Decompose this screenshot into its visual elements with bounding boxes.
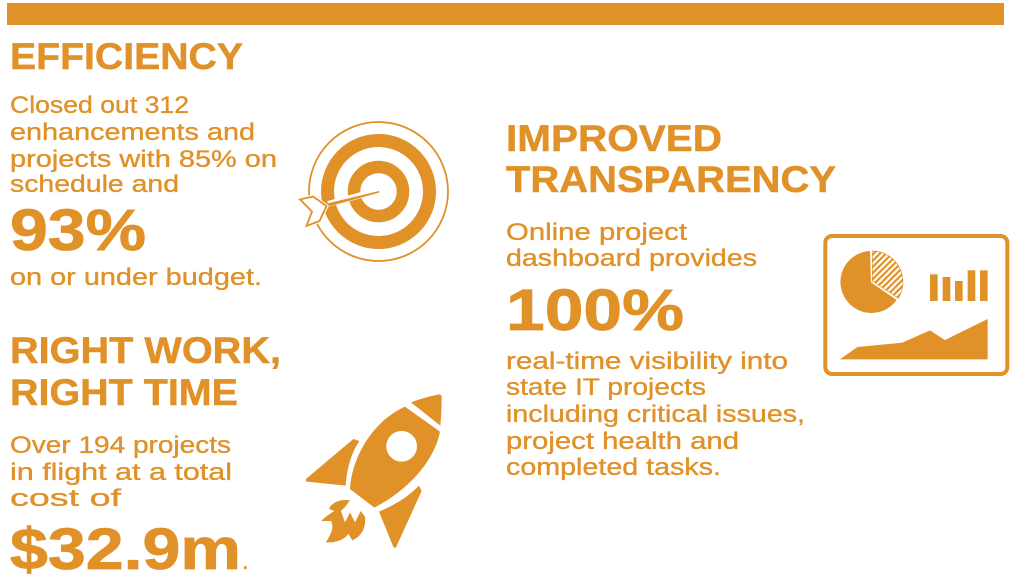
text: online project dashboard — [506, 219, 757, 272]
heading: efficiency: EFFICIENCY — [10, 36, 243, 77]
text: projects in flight: Over 194 projects — [10, 432, 231, 459]
top bar — [7, 3, 1004, 25]
text: real-time visibility: completed tasks. — [506, 454, 721, 481]
text: efficiency description — [10, 92, 277, 198]
text: efficiency description: schedule and — [10, 171, 179, 198]
text: efficiency description: projects with 85% on — [10, 146, 277, 173]
stat: 93%: 93% — [10, 198, 146, 263]
text: online project dashboard: Online project — [506, 219, 687, 246]
text: real-time visibility: including critical issues, — [506, 401, 805, 428]
heading: improved transparency: TRANSPARENCY — [506, 159, 836, 200]
heading: right work, right time: RIGHT WORK, — [10, 330, 281, 371]
text: real-time visibility: state IT projects — [506, 374, 706, 401]
text: real-time visibility: project health and — [506, 428, 739, 455]
text: efficiency description: enhancements and — [10, 119, 255, 146]
panel: improved transparency — [506, 118, 836, 481]
stat: 100%: 100% — [506, 278, 684, 343]
text: on or under budget: on or under budget. — [10, 264, 262, 291]
heading: improved transparency — [506, 118, 836, 200]
text: projects in flight: in flight at a total — [10, 459, 232, 486]
stat: $32.9m: . — [242, 548, 249, 575]
text: real-time visibility: real-time visibility into — [506, 348, 788, 375]
text: online project dashboard: dashboard provides — [506, 245, 757, 272]
panel: right work, right time — [10, 330, 281, 576]
panel: efficiency — [10, 36, 277, 291]
text: real-time visibility — [506, 348, 805, 481]
text: projects in flight — [10, 432, 232, 512]
heading: right work, right time: RIGHT TIME — [10, 372, 238, 413]
icon: dashboard — [825, 236, 1007, 374]
icon: rocket — [306, 394, 442, 548]
text: projects in flight: cost of — [10, 485, 122, 512]
heading: right work, right time — [10, 330, 281, 413]
text: efficiency description: Closed out 312 — [10, 92, 189, 119]
icon: target with arrow — [299, 122, 448, 261]
heading: improved transparency: IMPROVED — [506, 118, 722, 159]
